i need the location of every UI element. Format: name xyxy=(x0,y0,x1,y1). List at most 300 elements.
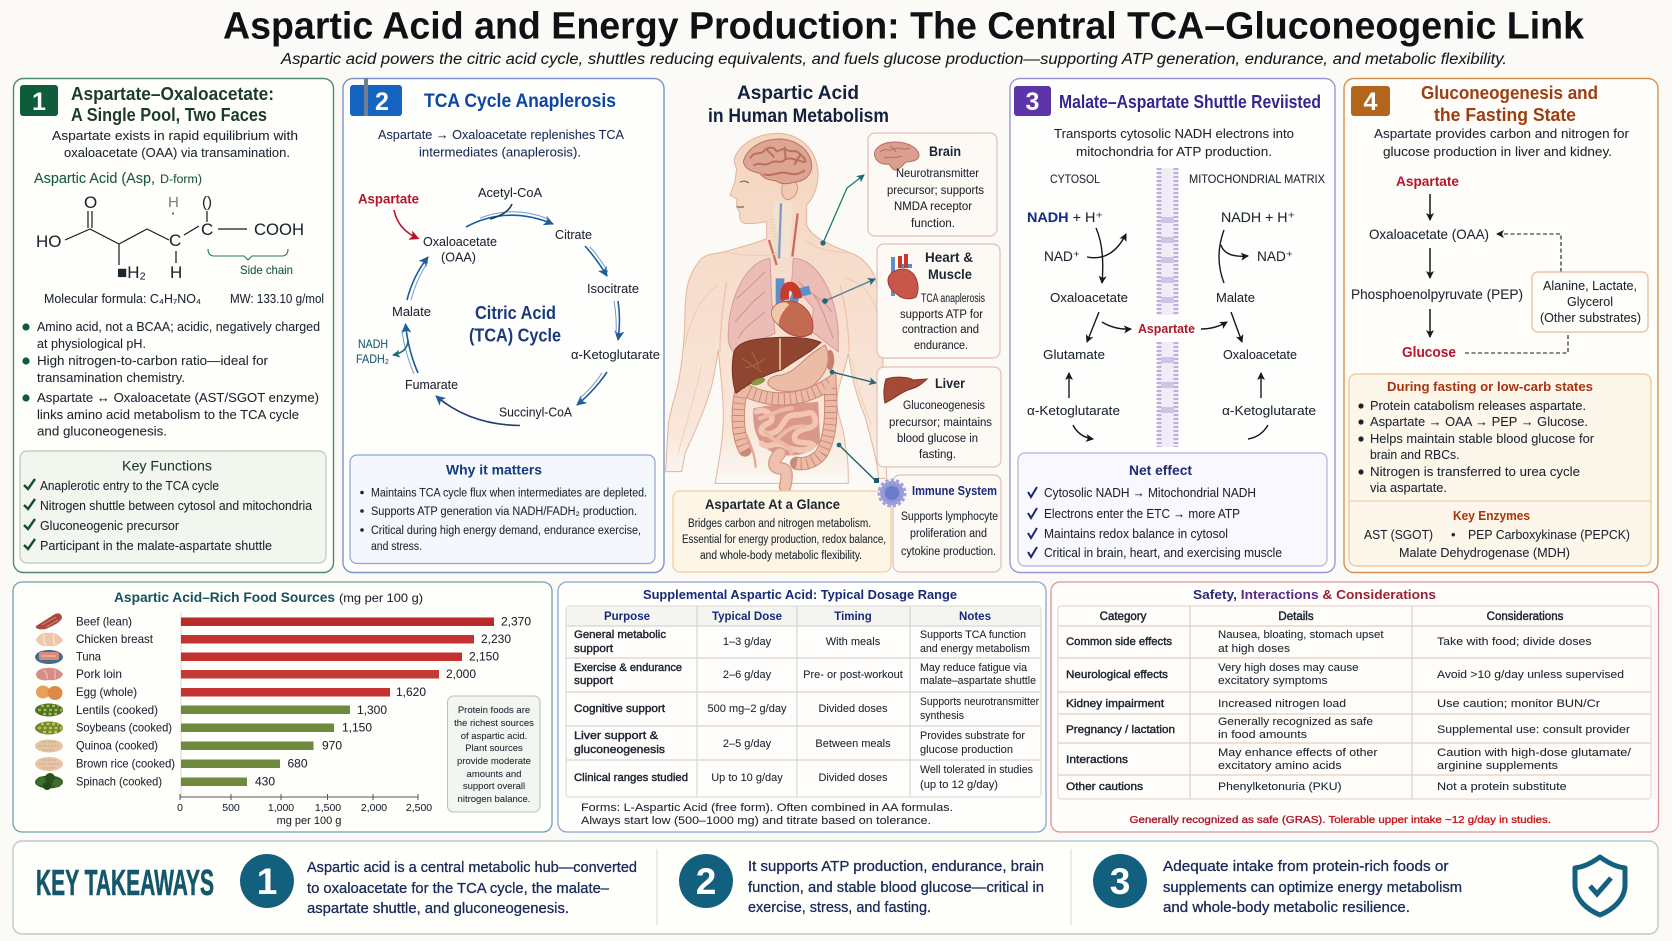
callout: aspartate at a glance: Essential for energy production, redox balance, xyxy=(682,534,886,546)
shuttle diagram: NAD⁺ xyxy=(1257,248,1293,264)
food labels: Beef (lean) xyxy=(76,614,132,628)
key functions box: Anaplerotic entry to the TCA cycle xyxy=(40,478,219,493)
safety table text: Phenylketonuria (PKU) xyxy=(1218,781,1342,793)
panel: food sources chart xyxy=(13,582,552,832)
safety table text: excitatory amino acids xyxy=(1218,760,1342,772)
chart note xyxy=(448,696,540,812)
shuttle diagram xyxy=(1027,209,1316,439)
dosage table text: Notes xyxy=(959,611,991,623)
panel 2 heading: TCA Cycle Anaplerosis xyxy=(424,91,616,112)
bullet list: links amino acid metabolism to the TCA cycle xyxy=(37,407,299,422)
shuttle diagram: Oxaloacetate xyxy=(1223,347,1297,362)
gluconeogenesis pathway xyxy=(1351,173,1568,361)
callout: aspartate at a glance: Bridges carbon and nitrogen metabolism. xyxy=(688,518,871,530)
shuttle diagram: Oxaloacetate xyxy=(1050,290,1128,305)
badge 3: 3 xyxy=(1026,88,1039,116)
food labels: Soybeans (cooked) xyxy=(76,720,172,734)
shuttle diagram: α-Ketoglutarate xyxy=(1027,403,1120,418)
takeaway 1 xyxy=(240,854,637,917)
chart axis: 0 xyxy=(177,802,183,814)
callout: immune system: cytokine production. xyxy=(901,546,996,558)
chemical structure: O xyxy=(84,193,97,212)
callout: immune system: proliferation and xyxy=(910,528,987,540)
formula and weight: MW: 133.10 g/mol xyxy=(230,292,324,306)
badge 4: 4 xyxy=(1364,88,1378,116)
pointer lines xyxy=(820,175,879,483)
safety table text: Category xyxy=(1100,611,1147,623)
food labels: Brown rice (cooked) xyxy=(76,756,175,770)
chart note: amounts and xyxy=(467,769,521,780)
callout: aspartate at a glance: Aspartate At a Glance xyxy=(705,496,840,512)
panel 1 heading: A Single Pool, Two Faces xyxy=(71,105,267,125)
bar chart: 2,150 xyxy=(469,650,499,664)
icon: brain xyxy=(875,142,919,170)
column labels: MITOCHONDRIAL MATRIX xyxy=(1189,174,1325,186)
other substrates box xyxy=(1532,272,1648,332)
net effect box: Critical in brain, heart, and exercising muscle xyxy=(1044,545,1282,560)
food labels: Chicken breast xyxy=(76,632,154,646)
dosage table text: Supports neurotransmitter xyxy=(920,696,1039,708)
safety note: Generally recognized as safe (GRAS). Tolerable upper intake ~12 g/day in studies. xyxy=(1130,814,1551,826)
gluconeogenesis pathway: Aspartate xyxy=(1396,173,1459,189)
bullet list: High nitrogen-to-carbon ratio—ideal for xyxy=(37,353,269,368)
dosage table grid xyxy=(566,606,1041,797)
chart note: Protein foods are xyxy=(458,705,530,716)
dosage table text: May reduce fatigue via xyxy=(920,662,1028,674)
takeaway 3: 3 xyxy=(1110,861,1130,902)
fasting box: Key Enzymes xyxy=(1453,508,1530,523)
chart axis: 2,500 xyxy=(406,802,432,814)
structure label: D-form) xyxy=(160,174,202,186)
TCA cycle diagram: (TCA) Cycle xyxy=(469,326,561,346)
bar chart: 680 xyxy=(288,756,308,770)
net effect box: Net effect xyxy=(1129,462,1192,478)
safety table text: Common side effects xyxy=(1066,636,1173,648)
dosage table text: gluconeogenesis xyxy=(574,744,666,756)
TCA cycle diagram: Citrate xyxy=(555,227,592,242)
safety table text: at high doses xyxy=(1218,643,1291,655)
dosage table text: Typical Dose xyxy=(712,611,782,623)
panel 3 heading: Malate–Aspartate Shuttle Reviisted xyxy=(1059,92,1321,112)
formula and weight xyxy=(44,292,324,306)
food labels: Quinoa (cooked) xyxy=(76,738,158,752)
callout: aspartate at a glance: and whole-body metabolic flexibility. xyxy=(700,550,862,562)
callout: brain: function. xyxy=(911,218,955,230)
central heading: Aspartic Acid xyxy=(737,82,859,104)
net effect box: Maintains redox balance in cytosol xyxy=(1044,526,1228,541)
panel 4 heading: Gluconeogenesis and xyxy=(1421,83,1598,103)
safety table text: Take with food; divide doses xyxy=(1437,636,1592,648)
TCA cycle diagram xyxy=(356,185,660,426)
dosage footnote xyxy=(581,802,953,827)
safety table text: Caution with high-dose glutamate/ xyxy=(1437,747,1632,759)
dosage table text: support xyxy=(574,675,613,687)
panel 3 intro xyxy=(1054,126,1294,159)
shuttle diagram: α-Ketoglutarate xyxy=(1222,403,1316,418)
other substrates box: Alanine, Lactate, xyxy=(1543,278,1637,293)
fasting box: Protein catabolism releases aspartate. xyxy=(1370,398,1586,413)
callout: aspartate at a glance xyxy=(673,491,891,572)
bar chart: 2,000 xyxy=(446,667,476,681)
net effect box xyxy=(1018,453,1327,566)
panel: dosage table xyxy=(558,582,1046,832)
lungs xyxy=(728,258,838,352)
safety table text: arginine supplements xyxy=(1437,760,1559,772)
dosage table text: Between meals xyxy=(815,738,891,750)
dosage table text: Cognitive support xyxy=(574,703,665,715)
chemical structure xyxy=(36,193,304,282)
panel: key takeaways xyxy=(13,841,1658,934)
central heading xyxy=(708,82,889,127)
dosage footnote: Always start low (500–1000 mg) and titrate based on tolerance. xyxy=(581,815,931,827)
callout: liver: Liver xyxy=(935,375,965,391)
safety table text: Pregnancy / lactation xyxy=(1066,724,1175,736)
callout: brain: precursor; supports xyxy=(887,185,984,197)
safety table text: Interactions xyxy=(1066,754,1129,766)
dosage table text: Liver support & xyxy=(574,730,659,742)
badge 2: 2 xyxy=(375,88,389,116)
gluconeogenesis pathway: Glucose xyxy=(1402,345,1456,361)
key functions box: Gluconeogenic precursor xyxy=(40,518,180,533)
takeaway 1: to oxaloacetate for the TCA cycle, the malate– xyxy=(307,880,610,897)
shuttle diagram: NAD⁺ xyxy=(1044,248,1080,264)
takeaway 1: aspartate shuttle, and gluconeogenesis. xyxy=(307,900,569,917)
TCA cycle diagram: Acetyl-CoA xyxy=(478,185,542,200)
why it matters box: Why it matters xyxy=(446,462,542,478)
panel 2 intro: Aspartate → Oxaloacetate replenishes TCA xyxy=(378,127,624,142)
why it matters box: Critical during high energy demand, endurance exercise, xyxy=(371,525,641,537)
callout: heart and muscle: Muscle xyxy=(928,266,972,282)
dosage table text: Clinical ranges studied xyxy=(574,772,688,784)
chart note: of aspartic acid. xyxy=(461,731,527,742)
safety table text: Not a protein substitute xyxy=(1437,781,1567,793)
brain xyxy=(743,139,812,184)
bar chart xyxy=(181,612,531,797)
safety table text: Kidney impairment xyxy=(1066,698,1164,710)
dosage table text: 2–6 g/day xyxy=(723,669,772,681)
safety table grid xyxy=(1058,606,1651,799)
safety table text: Neurological effects xyxy=(1066,669,1169,681)
title: Aspartic Acid and Energy Production: The Central TCA–Gluconeogenic Link xyxy=(223,6,1585,48)
food labels: Spinach (cooked) xyxy=(76,774,162,788)
food labels: Egg (whole) xyxy=(76,685,137,699)
safety table text: Generally recognized as safe xyxy=(1218,716,1373,728)
fasting box: Malate Dehydrogenase (MDH) xyxy=(1399,545,1570,560)
TCA cycle diagram: Succinyl-CoA xyxy=(499,404,572,420)
panel 1 heading: Aspartate–Oxaloacetate: xyxy=(71,84,274,104)
callout: heart and muscle: endurance. xyxy=(914,340,968,352)
bar chart: 2,370 xyxy=(501,614,531,628)
fasting box: PEP Carboxykinase (PEPCK) xyxy=(1468,527,1630,542)
takeaway 3: and whole-body metabolic resilience. xyxy=(1163,899,1410,916)
callout: heart and muscle: contraction and xyxy=(902,324,979,336)
net effect box: Cytosolic NADH → Mitochondrial NADH xyxy=(1044,485,1256,500)
badge 1 xyxy=(20,85,58,116)
fasting box: brain and RBCs. xyxy=(1370,447,1460,462)
food icons xyxy=(35,613,63,790)
chemical structure: COOH xyxy=(254,220,304,239)
panel: 4 gluconeogenesis xyxy=(1344,78,1658,572)
bullet list: at physiological pH. xyxy=(37,336,146,351)
dosage table text: 1–3 g/day xyxy=(723,636,772,648)
TCA cycle diagram: (OAA) xyxy=(441,250,476,264)
central heading: in Human Metabolism xyxy=(708,105,889,127)
ear xyxy=(782,180,798,199)
key functions box xyxy=(20,451,326,563)
chart axis: 500 xyxy=(222,802,240,814)
callout: liver: blood glucose in xyxy=(897,433,978,445)
safety table text: Supplemental use: consult provider xyxy=(1437,724,1630,736)
chart axis: 2,000 xyxy=(361,802,387,814)
chemical structure: ■H₂ xyxy=(117,263,146,282)
food labels xyxy=(76,614,175,788)
TCA cycle diagram: NADH xyxy=(358,337,388,351)
badge 1: 1 xyxy=(32,88,46,116)
takeaway 2 xyxy=(679,854,1044,916)
callout: liver: Gluconeogenesis xyxy=(903,400,985,412)
callout: immune system: Immune System xyxy=(912,484,997,498)
chart note: Plant sources xyxy=(465,743,523,754)
safety table text: Very high doses may cause xyxy=(1218,662,1358,674)
food labels: Tuna xyxy=(76,650,101,664)
badge 3 xyxy=(1014,86,1051,116)
panel 1 intro xyxy=(52,128,298,160)
liver xyxy=(732,337,821,393)
formula and weight: Molecular formula: C₄H₇NO₄ xyxy=(44,292,201,306)
dosage table text: Timing xyxy=(834,611,872,623)
bullet list: Amino acid, not a BCAA; acidic, negatively charged xyxy=(37,319,320,334)
human body illustration xyxy=(666,133,887,487)
callout: liver: precursor; maintains xyxy=(889,417,992,429)
dosage table text: 2–5 g/day xyxy=(723,738,772,750)
bullet list xyxy=(22,319,320,438)
badge 4 xyxy=(1351,86,1390,116)
chemical structure: H xyxy=(168,194,179,211)
bar chart: 2,230 xyxy=(481,632,511,646)
safety table text: excitatory symptoms xyxy=(1218,675,1328,687)
key functions box: Nitrogen shuttle between cytosol and mitochondria xyxy=(40,498,313,513)
chart axis: mg per 100 g xyxy=(277,815,341,827)
callout: heart and muscle: TCA anaplerosis xyxy=(921,293,985,305)
dosage table text: 500 mg–2 g/day xyxy=(708,703,787,715)
dosage table text: General metabolic xyxy=(574,629,667,641)
callout: brain: NMDA receptor xyxy=(894,201,972,213)
key functions box: Participant in the malate-aspartate shuttle xyxy=(40,538,272,553)
other substrates box: Glycerol xyxy=(1567,294,1613,309)
gluconeogenesis pathway: Oxaloacetate (OAA) xyxy=(1369,226,1489,242)
panel 4 intro xyxy=(1374,126,1630,159)
TCA cycle diagram: Aspartate xyxy=(358,192,419,206)
takeaway 1: Aspartic acid is a central metabolic hub—converted xyxy=(307,859,637,876)
panel 1 intro: Aspartate exists in rapid equilibrium with xyxy=(52,128,298,143)
dosage table text: Supports TCA function xyxy=(920,629,1026,641)
fasting box: • xyxy=(1451,527,1456,542)
panel 2 intro xyxy=(378,127,624,160)
chart title: (mg per 100 g) xyxy=(339,591,423,605)
dosage table text: Up to 10 g/day xyxy=(711,772,783,784)
dosage table text: glucose production xyxy=(920,744,1013,756)
dosage table text: support xyxy=(574,643,613,655)
dosage footnote: Forms: L-Aspartic Acid (free form). Often combined in AA formulas. xyxy=(581,802,953,814)
intestines xyxy=(738,383,831,487)
dosage table text: Provides substrate for xyxy=(920,730,1025,742)
chart note: support overall xyxy=(463,781,525,792)
dosage table text: Divided doses xyxy=(818,703,888,715)
net effect box: Electrons enter the ETC → more ATP xyxy=(1044,506,1240,521)
callout: heart and muscle: Heart & xyxy=(925,249,973,265)
TCA cycle diagram: FADH₂ xyxy=(356,352,389,366)
shuttle diagram: Glutamate xyxy=(1043,347,1105,362)
icon: heart xyxy=(888,254,918,299)
safety table text: Nausea, bloating, stomach upset xyxy=(1218,629,1384,641)
fasting box: AST (SGOT) xyxy=(1364,527,1433,542)
why it matters box: and stress. xyxy=(371,541,422,553)
chart axis xyxy=(177,794,432,827)
safety table text: Use caution; monitor BUN/Cr xyxy=(1437,698,1600,710)
fasting box: Aspartate → OAA → PEP → Glucose. xyxy=(1370,414,1588,429)
stomach xyxy=(768,345,828,391)
bullet list: transamination chemistry. xyxy=(37,370,185,385)
bullet list: Aspartate ↔ Oxaloacetate (AST/SGOT enzyme) xyxy=(37,390,319,405)
subtitle: Aspartic acid powers the citric acid cycle, shuttles reducing equivalents, and fuels glucose production—supporting ATP generation, endurance, and metabolic flexibility. xyxy=(280,51,1507,68)
fasting box: Nitrogen is transferred to urea cycle xyxy=(1370,464,1580,479)
bar chart: 1,620 xyxy=(396,685,426,699)
other substrates box: (Other substrates) xyxy=(1540,310,1641,325)
food labels: Pork loin xyxy=(76,667,122,681)
callout: immune system xyxy=(880,475,1001,572)
chart note: nitrogen balance. xyxy=(458,794,530,805)
callout: liver: fasting. xyxy=(919,449,956,461)
food labels: Lentils (cooked) xyxy=(76,703,158,717)
safety table text: Increased nitrogen load xyxy=(1218,698,1346,710)
chemical structure: C xyxy=(169,231,181,250)
safety title: Safety, Interactions & Considerations xyxy=(1193,587,1436,602)
panel 1 heading xyxy=(71,84,274,125)
dosage table text: and energy metabolism xyxy=(920,643,1030,655)
shuttle diagram: NADH + H⁺ xyxy=(1221,209,1295,225)
takeaway 3: Adequate intake from protein-rich foods or xyxy=(1163,858,1448,875)
panel 3 intro: mitochondria for ATP production. xyxy=(1076,144,1272,159)
why it matters box: Supports ATP generation via NADH/FADH₂ production. xyxy=(371,506,637,518)
takeaway 2: It supports ATP production, endurance, brain xyxy=(748,858,1044,875)
fasting box: via aspartate. xyxy=(1370,480,1447,495)
dosage title: Supplemental Aspartic Acid: Typical Dosage Range xyxy=(643,587,957,602)
bar chart: 430 xyxy=(255,774,275,788)
shuttle diagram: Aspartate xyxy=(1138,321,1195,336)
fasting box: During fasting or low-carb states xyxy=(1387,379,1593,394)
spleen xyxy=(826,350,834,370)
icon: immune cell xyxy=(880,481,904,505)
chart title: Aspartic Acid–Rich Food Sources xyxy=(114,590,335,605)
TCA cycle diagram: Isocitrate xyxy=(587,281,639,296)
panel 4 heading: the Fasting State xyxy=(1434,105,1576,125)
neck and chest detail xyxy=(678,202,877,453)
callout: liver xyxy=(877,367,1001,467)
dosage table text: synthesis xyxy=(920,710,964,722)
safety table text: in food amounts xyxy=(1218,729,1308,741)
panel: safety table xyxy=(1051,582,1658,832)
takeaway 2: 2 xyxy=(696,861,716,902)
dosage table text xyxy=(574,611,1039,791)
callout: heart and muscle xyxy=(877,244,1000,358)
badge 2 xyxy=(350,78,402,116)
key functions box: Key Functions xyxy=(122,458,212,474)
dosage table text: Divided doses xyxy=(818,772,888,784)
fasting box: Helps maintain stable blood glucose for xyxy=(1370,431,1595,446)
chart axis: 1,500 xyxy=(315,802,341,814)
panel 2 intro: intermediates (anaplerosis). xyxy=(419,144,581,160)
dosage table text: With meals xyxy=(826,636,881,648)
chart note: provide moderate xyxy=(457,756,531,767)
safety table text: May enhance effects of other xyxy=(1218,747,1378,759)
takeaway 3 xyxy=(1093,854,1462,916)
callout: brain: Neurotransmitter xyxy=(896,168,979,180)
callout: heart and muscle: supports ATP for xyxy=(900,309,983,321)
panel: 2 TCA cycle anaplerosis xyxy=(343,78,664,572)
panel 4 intro: glucose production in liver and kidney. xyxy=(1383,144,1612,159)
panel: 3 malate-aspartate shuttle xyxy=(1010,78,1335,572)
panel 3 intro: Transports cytosolic NADH electrons into xyxy=(1054,126,1294,141)
chemical structure: () xyxy=(202,194,212,211)
callout: immune system: Supports lymphocyte xyxy=(901,511,998,523)
safety table text: Other cautions xyxy=(1066,781,1144,793)
safety table text xyxy=(1066,611,1632,793)
takeaway 1: 1 xyxy=(257,861,277,902)
membrane xyxy=(1157,168,1178,447)
icon: shield xyxy=(1575,857,1625,915)
TCA cycle diagram: Fumarate xyxy=(405,377,458,392)
eye and mouth xyxy=(737,181,749,207)
callout: brain: Brain xyxy=(929,143,961,159)
gluconeogenesis pathway: Phosphoenolpyruvate (PEP) xyxy=(1351,286,1523,302)
bullet list: and gluconeogenesis. xyxy=(37,424,167,438)
panel: 1 aspartate-oxaloacetate xyxy=(14,78,334,572)
takeaway 2: function, and stable blood glucose—critical in xyxy=(748,879,1044,896)
safety table text: Details xyxy=(1278,611,1314,623)
dosage table text: Exercise & endurance xyxy=(574,662,682,674)
takeaways heading: KEY TAKEAWAYS xyxy=(36,862,214,903)
heart with vessels xyxy=(772,278,813,337)
panel 4 intro: Aspartate provides carbon and nitrogen for xyxy=(1374,126,1630,141)
panel 4 heading xyxy=(1421,83,1598,125)
chart axis: 1,000 xyxy=(268,802,294,814)
TCA cycle diagram: Malate xyxy=(392,304,431,319)
bar chart: 1,300 xyxy=(357,703,387,717)
bar chart: 970 xyxy=(322,738,342,752)
takeaway 2: exercise, stress, and fasting. xyxy=(748,899,931,916)
icon: liver xyxy=(884,377,927,403)
panel 1 intro: oxaloacetate (OAA) via transamination. xyxy=(64,145,290,160)
dosage table text: malate–aspartate shuttle xyxy=(920,675,1036,687)
chemical structure: H xyxy=(170,263,182,282)
dosage table text: (up to 12 g/day) xyxy=(920,779,998,791)
why it matters box xyxy=(350,455,655,564)
shuttle diagram: Malate xyxy=(1216,290,1255,305)
structure label: Aspartic Acid (Asp, xyxy=(34,171,155,187)
chart note: the richest sources xyxy=(454,718,534,729)
safety table text: Considerations xyxy=(1487,611,1564,623)
bar chart: 1,150 xyxy=(342,720,372,734)
takeaway 3: supplements can optimize energy metabolism xyxy=(1163,879,1462,896)
dosage table text: Pre- or post-workout xyxy=(803,669,903,681)
column labels: CYTOSOL xyxy=(1050,174,1101,186)
dosage table text: Well tolerated in studies xyxy=(920,764,1033,776)
chemical structure: Side chain xyxy=(240,263,293,277)
why it matters box: Maintains TCA cycle flux when intermediates are depleted. xyxy=(371,488,647,500)
TCA cycle diagram: Citric Acid xyxy=(475,303,556,323)
chemical structure: HO xyxy=(36,232,62,251)
TCA cycle diagram: α-Ketoglutarate xyxy=(571,347,660,362)
